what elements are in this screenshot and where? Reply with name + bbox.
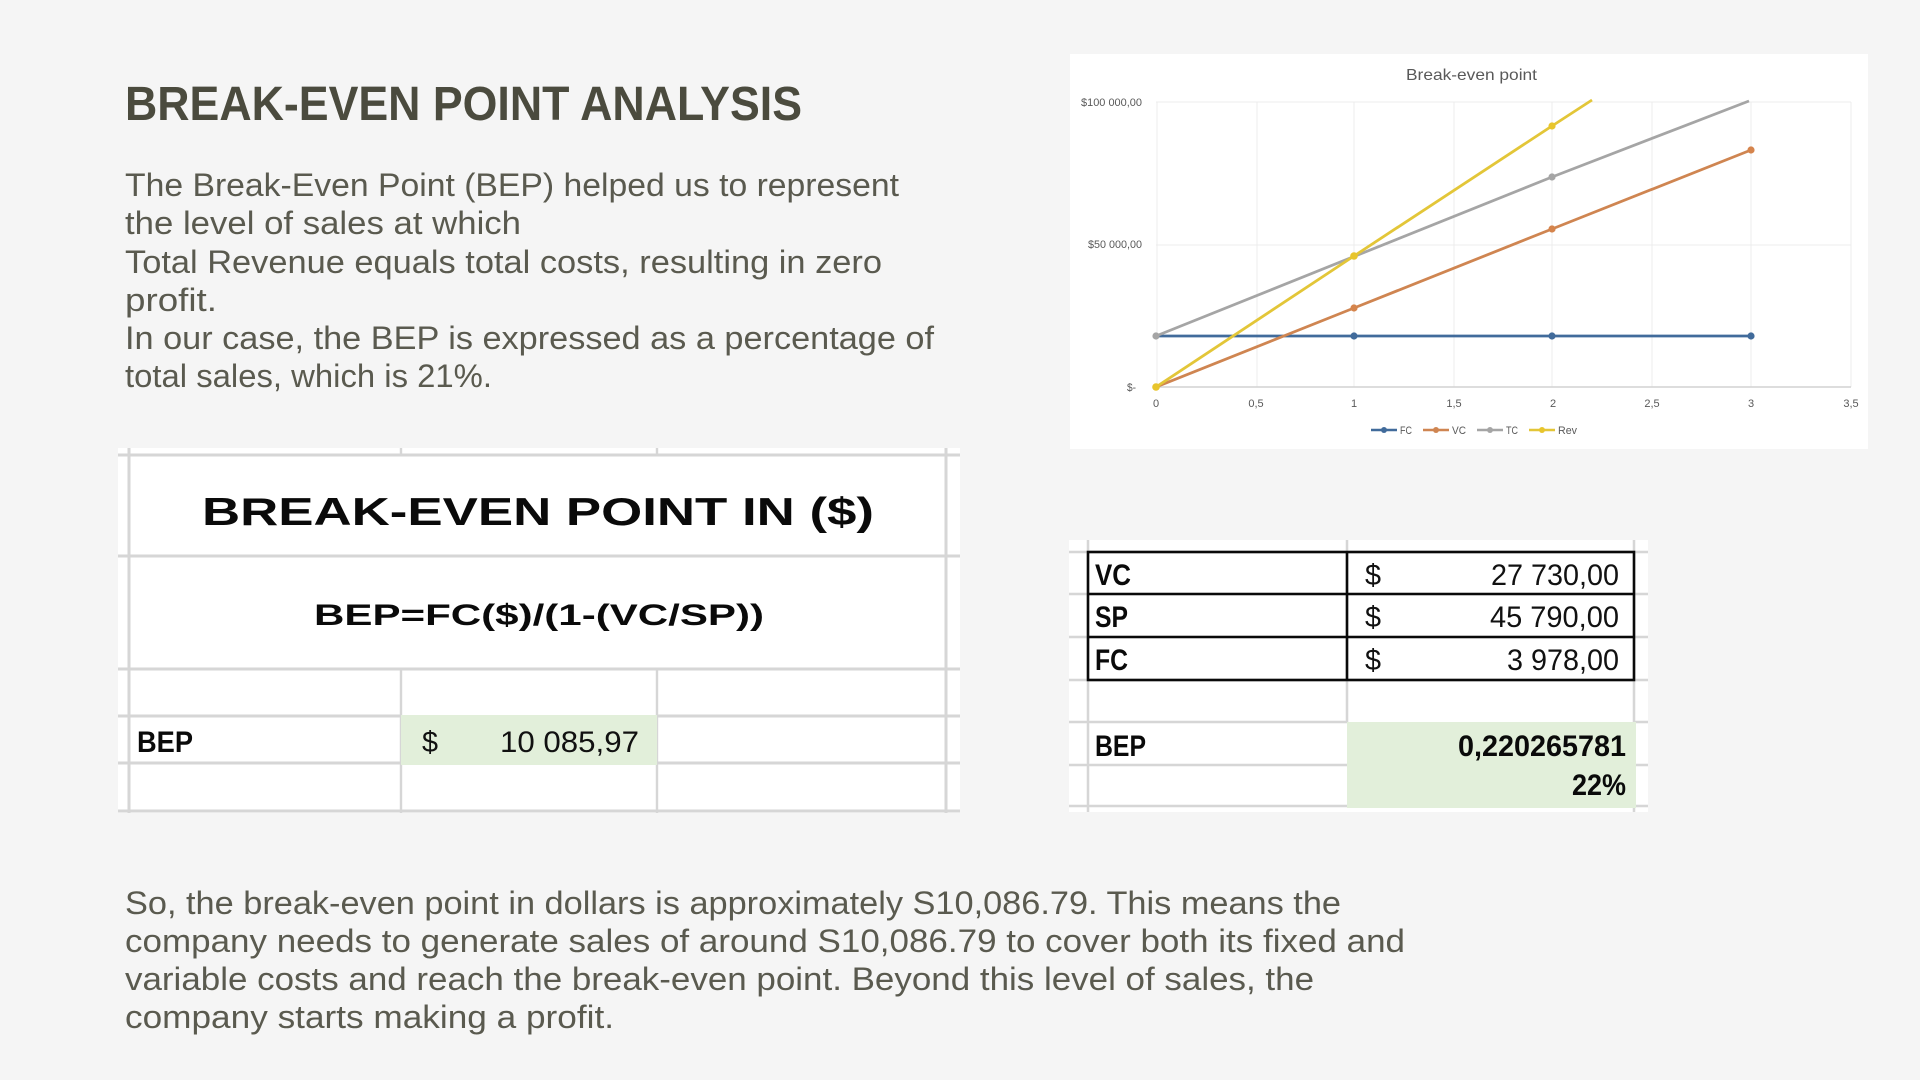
- BEP value: [422, 726, 639, 759]
- row: BEP: 22%: [1572, 769, 1626, 802]
- series: VC: [1156, 146, 1755, 387]
- BEP value: 10 085,97: [500, 726, 639, 759]
- title: BREAK-EVEN POINT ANALYSIS: [125, 78, 802, 131]
- row: VC: 27 730,00: [1491, 559, 1619, 592]
- x axis labels: 0,5: [1248, 398, 1264, 410]
- table heading: BREAK-EVEN POINT IN ($): [202, 491, 874, 534]
- black input grid: [1088, 552, 1634, 680]
- y axis labels: $-: [1127, 382, 1136, 394]
- x axis labels: 2: [1550, 398, 1556, 410]
- text block: BEP introduction: total sales, which is 21%.: [125, 358, 492, 394]
- text block: BEP introduction: In our case, the BEP is expressed as a percentage of: [125, 320, 934, 356]
- x axis labels: 3: [1748, 398, 1754, 410]
- text block: conclusion: [125, 885, 1405, 1035]
- row: FC: FC: [1095, 644, 1128, 677]
- text block: BEP introduction: the level of sales at which: [125, 205, 521, 241]
- chart legend: TC: [1506, 425, 1518, 437]
- y axis labels: [1081, 97, 1142, 394]
- panel: inputs and BEP percentage table: [1069, 540, 1648, 812]
- panel: break-even point in dollars table: [118, 448, 960, 813]
- BEP label: BEP: [137, 726, 193, 759]
- y axis labels: $50 000,00: [1088, 239, 1142, 251]
- y axis labels: $100 000,00: [1081, 97, 1142, 109]
- row: BEP: [1095, 730, 1626, 802]
- text block: BEP introduction: profit.: [125, 282, 217, 318]
- highlighted BEP cell: [401, 715, 657, 765]
- row: VC: $: [1365, 559, 1381, 592]
- formula: BEP=FC($)/(1-(VC/SP)): [314, 599, 764, 632]
- BEP value: $: [422, 726, 438, 759]
- row: SP: $: [1365, 601, 1381, 634]
- x axis labels: 3,5: [1843, 398, 1859, 410]
- row: BEP: 0,220265781: [1458, 730, 1626, 763]
- text block: conclusion: So, the break-even point in dollars is approximately S10,086.79. This means the: [125, 885, 1341, 921]
- row: FC: $: [1365, 644, 1381, 677]
- chart legend: VC: [1452, 425, 1466, 437]
- text block: conclusion: company needs to generate sales of around S10,086.79 to cover both its fixed and: [125, 923, 1405, 959]
- chart legend: Rev: [1558, 425, 1577, 437]
- series: FC: [1156, 332, 1755, 340]
- x axis labels: [1153, 398, 1859, 410]
- row: VC: [1095, 559, 1619, 592]
- row: FC: 3 978,00: [1507, 644, 1619, 677]
- highlighted result cells: [1347, 722, 1636, 808]
- row: BEP: BEP: [1095, 730, 1146, 763]
- text block: BEP introduction: Total Revenue equals total costs, resulting in zero: [125, 244, 882, 280]
- x axis labels: 1: [1351, 398, 1357, 410]
- panel: break-even line chart: [1070, 54, 1868, 449]
- chart legend: [1371, 425, 1577, 437]
- series: TC: [1152, 101, 1749, 340]
- x axis labels: 2,5: [1644, 398, 1660, 410]
- row: VC: VC: [1095, 559, 1131, 592]
- chart grid: [1156, 102, 1851, 387]
- row: SP: 45 790,00: [1490, 601, 1619, 634]
- row: SP: [1095, 601, 1619, 634]
- text block: BEP introduction: [125, 167, 934, 394]
- text block: conclusion: variable costs and reach the break-even point. Beyond this level of sales, the: [125, 961, 1314, 997]
- chart title: Break-even point: [1406, 67, 1538, 84]
- row: FC: [1095, 644, 1619, 677]
- text block: conclusion: company starts making a profit.: [125, 999, 614, 1035]
- chart legend: FC: [1400, 425, 1412, 437]
- x axis labels: 0: [1153, 398, 1159, 410]
- series: Rev: [1152, 100, 1592, 391]
- row: SP: SP: [1095, 601, 1128, 634]
- x axis labels: 1,5: [1446, 398, 1462, 410]
- text block: BEP introduction: The Break-Even Point (BEP) helped us to represent: [125, 167, 899, 203]
